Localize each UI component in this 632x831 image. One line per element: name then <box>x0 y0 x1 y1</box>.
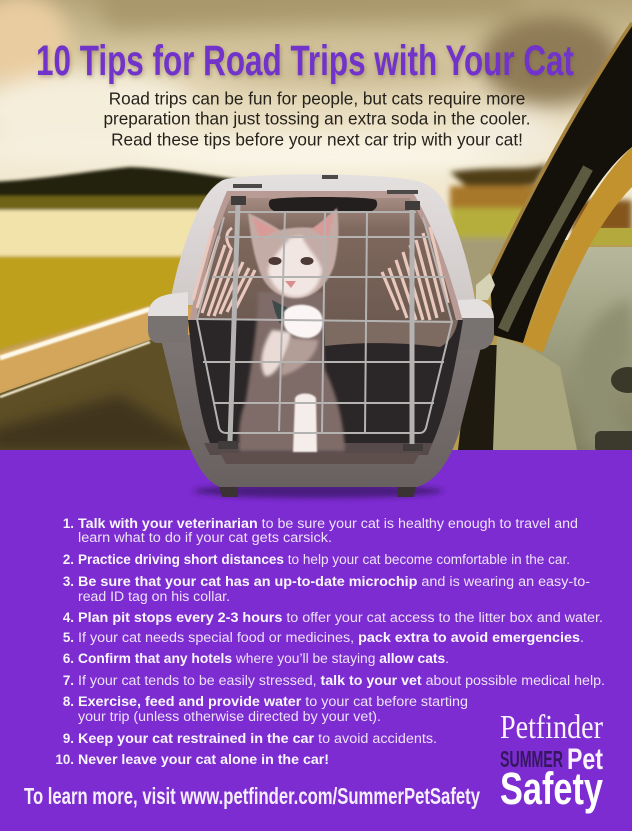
left hook <box>227 228 232 250</box>
carrier shadow <box>193 484 443 498</box>
door hinges <box>218 196 423 451</box>
gold door strip <box>523 147 632 353</box>
tip 2: 2. <box>63 552 74 567</box>
cat carrier with kitten <box>148 174 494 498</box>
pale bracket <box>476 273 495 300</box>
kitten <box>239 208 345 452</box>
door gap <box>458 345 497 450</box>
road surface dark <box>0 340 190 450</box>
lower shell <box>160 335 484 487</box>
tip 5: 5. <box>63 630 74 645</box>
kitten body <box>239 292 345 451</box>
kitten pink belly <box>280 338 318 376</box>
tip 3: Be sure that your cat has an up-to-date microchip and is wearing an easy-to- <box>78 574 590 589</box>
tip 1: Talk with your veterinarian to be sure your cat is healthy enough to travel and <box>78 516 578 531</box>
Petfinder Summer Pet Safety logo: Safety <box>500 763 603 814</box>
kitten chest <box>261 330 292 376</box>
intro text: preparation than just tossing an extra soda in the cooler. <box>103 108 531 128</box>
Petfinder Summer Pet Safety logo <box>500 709 604 814</box>
tip 7: If your cat tends to be easily stressed, talk to your vet about possible medical help. <box>78 673 605 688</box>
left vent stripes <box>193 228 255 316</box>
kitten nose <box>285 281 296 288</box>
tip 8: your trip (unless otherwise directed by your vet). <box>78 709 381 724</box>
tip 1: 1. <box>63 516 74 531</box>
kitten collar <box>272 300 288 324</box>
road edge white lines <box>0 309 150 358</box>
tip 1 <box>63 516 578 545</box>
tips list <box>55 516 605 767</box>
intro text: Read these tips before your next car trip with your cat! <box>111 130 523 150</box>
tip 6: Confirm that any hotels where you’ll be staying allow cats. <box>78 651 449 666</box>
kitten raised paw <box>284 305 323 338</box>
car interior with window pillar and door <box>458 23 632 453</box>
wire door frame <box>197 204 452 444</box>
kitten head <box>248 208 338 298</box>
tip 3 <box>63 574 590 604</box>
inner grey seal <box>503 168 588 330</box>
tip 8: Exercise, feed and provide water to your cat before starting <box>78 694 468 709</box>
background: blurred road scene <box>0 0 632 450</box>
upper shell <box>170 174 476 305</box>
tip 5: If your cat needs special food or medicines, pack extra to avoid emergencies . <box>78 630 584 645</box>
window pillar dark <box>490 23 632 343</box>
tip 4: 4. <box>63 610 74 625</box>
tip 4: Plan pit stops every 2-3 hours to offer your cat access to the litter box and water. <box>78 610 603 625</box>
intro text <box>103 88 531 150</box>
tip 3: 3. <box>63 574 74 589</box>
door opening lower window <box>188 320 463 448</box>
door bottom lip <box>220 453 420 464</box>
air vent <box>611 367 632 393</box>
tip 10: Never leave your cat alone in the car! <box>78 752 329 767</box>
tip 2: Practice driving short distances to help your cat become comfortable in the car. <box>78 552 570 567</box>
pillar gold edge <box>490 23 632 277</box>
tip 3: read ID tag on his collar. <box>78 589 230 604</box>
top handle slot <box>269 197 377 212</box>
purple panel <box>0 450 632 831</box>
lower vent <box>595 431 632 453</box>
left side ledge <box>148 292 188 318</box>
interior lighter arc <box>575 300 632 450</box>
right side ledge <box>458 299 494 320</box>
far window strip <box>574 228 632 245</box>
right vent stripes <box>382 227 448 320</box>
tip 8: 8. <box>63 694 74 709</box>
tip 6: 6. <box>63 651 74 666</box>
Petfinder Summer Pet Safety logo: Pet <box>567 743 603 776</box>
kitten face white <box>268 236 322 297</box>
tip 8 <box>63 694 468 724</box>
tip 9: 9. <box>63 731 74 746</box>
kitten eyes <box>268 257 282 265</box>
kitten white leg <box>293 394 317 452</box>
latches on top <box>233 175 418 194</box>
intro text: Road trips can be fun for people, but cats require more <box>109 88 525 108</box>
interior panel <box>535 247 632 450</box>
kitten ears inner <box>252 213 334 240</box>
tip 9: Keep your cat restrained in the car to avoid accidents. <box>78 731 437 746</box>
Petfinder Summer Pet Safety logo: SUMMER <box>500 746 563 772</box>
tip 1: learn what to do if your cat gets carsick. <box>78 530 332 545</box>
Petfinder Summer Pet Safety logo: Petfinder <box>500 709 604 746</box>
door panel <box>493 337 577 450</box>
tip 10: 10. <box>55 752 74 767</box>
tip 7: 7. <box>63 673 74 688</box>
carrier feet <box>218 482 416 497</box>
door opening upper <box>189 191 463 322</box>
